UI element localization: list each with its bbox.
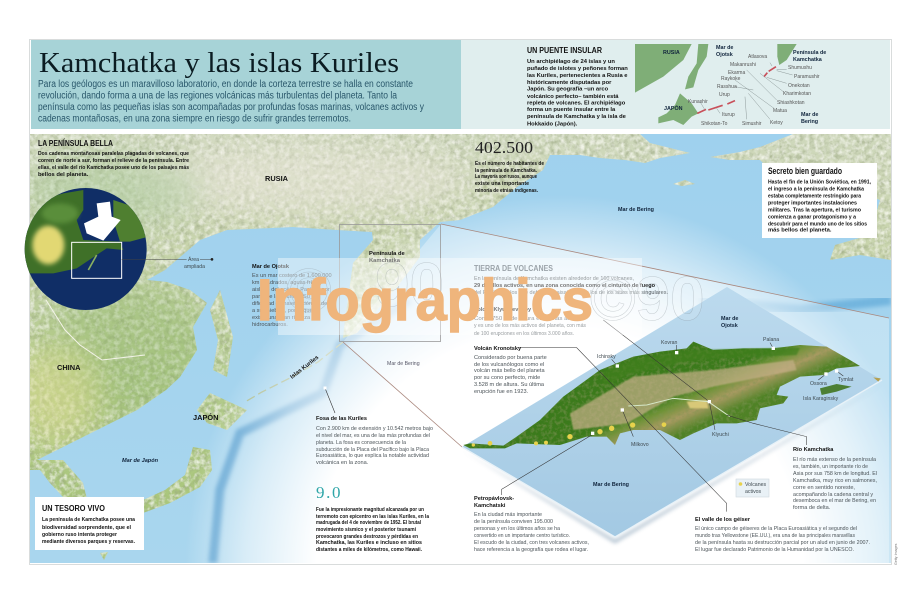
panel: secreto bien guardado: el ingreso a la península de Kamchatka bbox=[768, 186, 865, 192]
inset map labels: Iturup bbox=[722, 112, 735, 118]
inset map labels: Ojotsk bbox=[716, 52, 733, 58]
inset map shapes bbox=[635, 44, 797, 125]
stat: 402.500: Es el número de habitantes de bbox=[475, 161, 545, 167]
stat: 9.0: distantes a miles de kilómetros, como Hawaii. bbox=[316, 547, 422, 553]
icon: locator globe bbox=[20, 188, 213, 310]
watermark band bbox=[278, 258, 642, 335]
map labels: Kovran bbox=[661, 340, 678, 346]
inset map labels: JAPÓN bbox=[664, 104, 683, 112]
map labels: Ossora bbox=[810, 381, 827, 387]
land masses bbox=[29, 134, 891, 560]
land colour variation bbox=[10, 144, 470, 445]
watermark ghost numerals: 90 bbox=[375, 251, 444, 320]
inset map labels: Paramushir bbox=[794, 74, 820, 80]
zoom lines bbox=[343, 224, 889, 447]
text: mar de ojotsk: Es un mar costero de 1.600.000 bbox=[252, 273, 332, 279]
stat: 9.0: Kamchatka, las Kuriles e incluso en sitios bbox=[316, 540, 422, 546]
inset map labels: Onekotan bbox=[788, 83, 810, 89]
text: río kamchatka: desemboca en el mar de Bering, en bbox=[793, 498, 876, 504]
panel: un tesoro vivo: gobierno ruso intenta proteger bbox=[42, 532, 118, 538]
inset map labels: Shikotan-To bbox=[701, 121, 728, 127]
map labels: Mar de Japón bbox=[122, 458, 159, 464]
text: mar de ojotsk: parte de las Kuriles. Su bbox=[252, 294, 310, 300]
callout: fosa de las kuriles bbox=[316, 386, 433, 466]
credit: Getty Images bbox=[894, 543, 898, 565]
text: el valle de los géiser: de la península hasta su destrucción parcial por un alud en junio de 2007. bbox=[695, 540, 870, 546]
ocean trench bbox=[213, 300, 410, 563]
map labels: Milkovo bbox=[631, 442, 649, 448]
text: volcán krenetsky: Considerado por buena parte bbox=[474, 355, 547, 361]
text: río kamchatka: forma de delta. bbox=[793, 505, 831, 511]
map labels: Ichinsky bbox=[597, 354, 616, 360]
map labels: RUSIA bbox=[265, 174, 289, 183]
stat: 9.0: madrugada del 4 de noviembre de 1952. El brutal bbox=[316, 520, 421, 526]
stat: 402.500: la península de Kamchatka. bbox=[475, 168, 537, 174]
text: volcán krenetsky bbox=[474, 346, 547, 395]
watermark ghost numerals: © bbox=[286, 257, 332, 326]
text: un puente insular bbox=[527, 59, 628, 128]
Kamchatka peninsula relief bbox=[463, 320, 881, 512]
stat: 402.500: minoría de etnias indígenas. bbox=[475, 188, 538, 194]
3D panel bbox=[462, 287, 885, 543]
callout: fosa de las kuriles: Fosa de las Kuriles bbox=[316, 416, 367, 422]
callout: fosa de las kuriles: volcánica en la zona. bbox=[316, 460, 369, 466]
intro text: revolución, dando forma a una de las regiones volcánicas más turbulentas del planeta. Tanto la bbox=[38, 90, 397, 102]
text: un puente insular: las Kuriles, pertenecientes a Rusia e bbox=[527, 73, 628, 79]
text: petropávlovsk: hace referencia a la geografía que rodea el lugar. bbox=[474, 547, 588, 553]
text: río kamchatka: Río Kamchatka bbox=[793, 447, 834, 453]
inset map labels: Mar de bbox=[716, 45, 733, 51]
inset map labels: Raykoke bbox=[721, 76, 741, 82]
stat: 9.0: terremoto con epicentro en las islas Kuriles, en la bbox=[316, 514, 430, 520]
text: río kamchatka: El río más extenso de la península bbox=[793, 457, 877, 463]
text: río kamchatka: Asia por sus 758 km de longitud. El bbox=[793, 471, 877, 477]
map labels: CHINA bbox=[57, 363, 81, 372]
stat: 9.0: 9.0 bbox=[316, 483, 342, 502]
inset map labels: Simushir bbox=[742, 121, 762, 127]
text: un puente insular: Hokkaido (Japón). bbox=[527, 122, 578, 128]
inset map labels: Urup bbox=[719, 92, 730, 98]
panel: secreto bien guardado: militares. Tras la apertura, el turismo bbox=[768, 208, 861, 214]
text: mar de ojotsk: hidrocarburos. bbox=[252, 322, 288, 328]
inset map labels: Atlasova bbox=[748, 54, 767, 60]
text: mar de ojotsk: Mar de Ojotsk bbox=[252, 264, 290, 270]
inset map labels: Ketoy bbox=[770, 120, 783, 126]
panel: un tesoro vivo: UN TESORO VIVO bbox=[42, 504, 105, 513]
text: mar de ojotsk: dificultad de navegación se debe bbox=[252, 301, 333, 307]
inset map labels: Matua bbox=[773, 108, 787, 114]
text: el valle de los géiser: El único campo de géiseres de la Placa Euroasiática y el segundo del bbox=[695, 526, 857, 532]
legend: volcanes activos: Volcanes bbox=[745, 482, 766, 488]
text: tierra de volcanes bbox=[474, 263, 668, 337]
panel: secreto bien guardado: Hasta el fin de la Unión Soviética, en 1991, bbox=[768, 180, 871, 186]
text: petropávlovsk bbox=[474, 496, 589, 553]
stat: 402.500: existe una importante bbox=[475, 181, 530, 187]
text: el valle de los géiser: El lugar fue declarado Patrimonio de la Humanidad por la UNESCO. bbox=[695, 547, 854, 553]
map labels: Mar de bbox=[721, 316, 738, 322]
text: petropávlovsk: El escudo de la ciudad, con tres volcanes activos, bbox=[474, 540, 589, 546]
stat: 402.500: La mayoría son rusos, aunque bbox=[475, 174, 538, 180]
china borders bbox=[46, 300, 145, 360]
panel: un tesoro vivo: mediante diversos parques y reservas. bbox=[42, 539, 135, 545]
map labels: Mar de Bering bbox=[387, 361, 420, 367]
map labels: ampliada bbox=[184, 264, 205, 270]
text: petropávlovsk: de la península conviven 195.000 bbox=[474, 519, 553, 525]
panel: un tesoro vivo: biodiversidad sorprendente, que el bbox=[42, 525, 131, 531]
inset map labels: Kharimkotan bbox=[783, 91, 811, 97]
text: mar de ojotsk: aislado del océano Pacífico por bbox=[252, 287, 330, 293]
panel: secreto bien guardado: descubrir para el mundo uno de los sitios bbox=[768, 222, 867, 228]
text: petropávlovsk: Kamchatski bbox=[474, 503, 506, 509]
text: tierra de volcanes: TIERRA DE VOLCANES bbox=[474, 263, 553, 273]
inset map labels: Ekarma bbox=[728, 70, 745, 76]
legend: volcanes activos bbox=[736, 479, 769, 497]
map labels: Ojotsk bbox=[721, 323, 738, 329]
text: petropávlovsk: personas y en los últimos años se ha bbox=[474, 526, 561, 532]
map labels: Isla Karaginsky bbox=[803, 396, 839, 402]
text: mar de ojotsk: km cuadrados, aguas frías y bbox=[252, 280, 322, 286]
panel: un tesoro vivo: La península de Kamchatka posee una bbox=[42, 517, 136, 523]
town markers bbox=[591, 347, 838, 435]
stat: 402.500: 402.500 bbox=[475, 138, 533, 157]
zoom cone bbox=[343, 224, 889, 563]
legend: volcanes activos: activos bbox=[745, 489, 762, 495]
text: petropávlovsk: Petropávlovsk- bbox=[474, 496, 514, 502]
text: río kamchatka: Kamchatka, muy rico en salmones, bbox=[793, 478, 877, 484]
intro text: Para los geólogos es un maravilloso laboratorio, en donde la corteza terrestre se halla en constante bbox=[38, 79, 413, 90]
text: la península bella: corren de norte a sur, forman el relieve de la península. Entre bbox=[38, 158, 190, 164]
Kuril islands bbox=[245, 342, 343, 402]
text: mar de ojotsk bbox=[252, 264, 333, 328]
stat: 9.0: provocaron grandes destrozos y pérdidas en bbox=[316, 534, 418, 540]
volcano markers bbox=[472, 422, 666, 447]
text: un puente insular: históricamente disputadas por bbox=[527, 80, 612, 86]
watermark ghost numerals: ©90 bbox=[590, 265, 705, 334]
intro text bbox=[38, 79, 424, 124]
map labels: JAPÓN bbox=[193, 413, 218, 422]
text: volcán krenetsky: 3.528 m de altura. Su última bbox=[474, 382, 545, 388]
map labels: Klyuchi bbox=[712, 432, 729, 438]
text: un puente insular: repleta de volcanes. El archipiélago bbox=[527, 100, 626, 106]
map labels: Palana bbox=[763, 337, 779, 343]
text: la península bella: LA PENÍNSULA BELLA bbox=[38, 139, 113, 148]
inset map labels: Kunashir bbox=[688, 99, 708, 105]
heading: un puente insular: UN PUENTE INSULAR bbox=[527, 45, 603, 55]
text: río kamchatka: es, también, un importante río de bbox=[793, 464, 868, 470]
watermark ghost numerals bbox=[286, 251, 705, 334]
callout: fosa de las kuriles: Con 2.900 km de extensión y 10.542 metros bajo bbox=[316, 426, 433, 432]
text: volcán krenetsky: erupción fue en 1923. bbox=[474, 389, 529, 395]
inset map labels: Shiashkotan bbox=[777, 100, 805, 106]
intro text: península como las pequeñas islas son acompañadas por profundas fosas marinas, volcanes activos y bbox=[38, 102, 424, 113]
text: río kamchatka bbox=[793, 447, 877, 511]
zoom box bbox=[340, 224, 440, 342]
text: la península bella bbox=[38, 139, 190, 178]
panel: secreto bien guardado: estaba completamente restringido para bbox=[768, 194, 862, 200]
text: el valle de los géiser bbox=[695, 517, 870, 553]
inset map labels: Rasshua bbox=[717, 84, 737, 90]
map labels: Mar de Bering bbox=[593, 482, 629, 488]
stat: 9.0: Fue la impresionante magnitud alcanzada por un bbox=[316, 507, 424, 513]
callout: fosa de las kuriles: planeta. La fosa es consecuencia de la bbox=[316, 440, 407, 446]
panel: un tesoro vivo bbox=[35, 497, 144, 550]
text: volcán krenetsky: Volcán Kronotsky bbox=[474, 346, 522, 352]
intro text: cadenas montañosas, en una zona siempre en riesgo de sufrir grandes terremotos. bbox=[38, 114, 351, 124]
inset map labels: Makanrushi bbox=[730, 62, 756, 68]
text: tierra de volcanes: Con 4.750 m de altura es el más alto bbox=[474, 316, 574, 322]
text: la península bella: Dos cadenas montañosas paralelas plagadas de volcanes, que bbox=[38, 151, 190, 157]
inset map labels: Shumushu bbox=[788, 65, 812, 71]
text: tierra de volcanes: del Pacífico, a los que debe sus paisajes como los de los sitios más singulares. bbox=[474, 290, 668, 296]
map labels: Área bbox=[188, 256, 199, 263]
map labels: Tymlat bbox=[838, 377, 854, 383]
text: la península bella: bellos del planeta. bbox=[38, 172, 89, 178]
white fade bbox=[196, 205, 891, 563]
text: el valle de los géiser: mundo tras Yellowstone (EE.UU.), era una de las principales maravillas bbox=[695, 533, 855, 539]
text: río kamchatka: acompañando la cadena central y bbox=[793, 492, 873, 498]
text: un puente insular: Un archipiélago de 24 islas y un bbox=[527, 59, 615, 65]
map labels: Península de bbox=[369, 251, 406, 257]
text: mar de ojotsk: a sus nieblas, por lo que bbox=[252, 308, 313, 314]
callout: fosa de las kuriles: subducción de la Placa del Pacífico bajo la Placa bbox=[316, 447, 430, 453]
text: un puente insular: volcánico perfecto– también está bbox=[527, 94, 619, 100]
text: un puente insular: Japón. Su geografía –un arco bbox=[527, 86, 609, 92]
map labels: Islas Kuriles bbox=[290, 355, 320, 381]
text: volcán krenetsky: por su cono perfecto, mide bbox=[474, 375, 540, 381]
panel: header bbox=[31, 40, 461, 129]
inset map labels: RUSIA bbox=[663, 50, 680, 56]
stat: 402.500 bbox=[475, 138, 545, 194]
panel: secreto bien guardado: Secreto bien guardado bbox=[768, 166, 842, 176]
map labels bbox=[57, 174, 854, 488]
text: tierra de volcanes: En la península de Kamchatka existen alrededor de 160 volcanes, bbox=[474, 276, 634, 282]
stat: 9.0 bbox=[316, 483, 430, 553]
inset map labels: Mar de bbox=[801, 112, 818, 118]
text: petropávlovsk: En la ciudad más importante bbox=[474, 512, 542, 518]
callout: fosa de las kuriles: el nivel del mar, es una de las más profundas del bbox=[316, 433, 430, 439]
map labels: Mar de Bering bbox=[618, 207, 654, 213]
panel: secreto bien guardado: más bellos del planeta. bbox=[768, 228, 832, 234]
stat: 9.0: movimiento sísmico y el posterior tsunami bbox=[316, 527, 416, 533]
panel: un puente insular bbox=[461, 40, 890, 129]
text: tierra de volcanes: 29 de ellos activos, en una zona conocida como el cinturón de fuego bbox=[474, 283, 655, 289]
text: la península bella: ellas, el valle del río Kamchatka posee uno de los paisajes más bbox=[38, 165, 189, 171]
text: petropávlovsk: convertido en un importante centro turístico. bbox=[474, 533, 570, 539]
callout: fosa de las kuriles: Euroasiática, lo que explica la notable actividad bbox=[316, 453, 429, 459]
text: tierra de volcanes: y es uno de los más activos del planeta, con más bbox=[474, 323, 586, 329]
watermark text: Infographics bbox=[257, 268, 593, 333]
text: río kamchatka: corre en sentido noreste, bbox=[793, 485, 855, 491]
inset map labels bbox=[663, 45, 826, 127]
text: tierra de volcanes: de 100 erupciones en los últimos 3.000 años. bbox=[474, 331, 574, 337]
text: un puente insular: puñado de islotes y peñones forman bbox=[527, 66, 628, 72]
inset map labels: Península de bbox=[793, 50, 826, 56]
panel: secreto bien guardado: proteger importantes instalaciones bbox=[768, 200, 857, 206]
text: un puente insular: forma un puente insular entre la bbox=[527, 107, 616, 113]
map labels: Kamchatka bbox=[369, 258, 401, 264]
panel: secreto bien guardado: comienza a ganar protagonismo y a bbox=[768, 214, 857, 220]
panel: secreto bien guardado bbox=[762, 163, 877, 238]
text: el valle de los géiser: El valle de los géiser bbox=[695, 517, 751, 523]
text: un puente insular: península de Kamchatka y la isla de bbox=[527, 114, 627, 120]
text: volcán krenetsky: volcán más bello del planeta bbox=[474, 368, 545, 374]
main map bbox=[10, 134, 891, 563]
leader lines bbox=[502, 320, 843, 512]
inset map labels: Bering bbox=[801, 119, 818, 125]
text: mar de ojotsk: existe una gran riqueza de bbox=[252, 315, 318, 321]
text: tierra de volcanes: Volcán Klyuchevskoy bbox=[474, 307, 532, 313]
text: volcán krenetsky: de los vulcanólogos como el bbox=[474, 362, 544, 368]
inset map labels: Kamchatka bbox=[793, 57, 823, 63]
title: Kamchatka y las islas Kuriles bbox=[39, 48, 399, 79]
